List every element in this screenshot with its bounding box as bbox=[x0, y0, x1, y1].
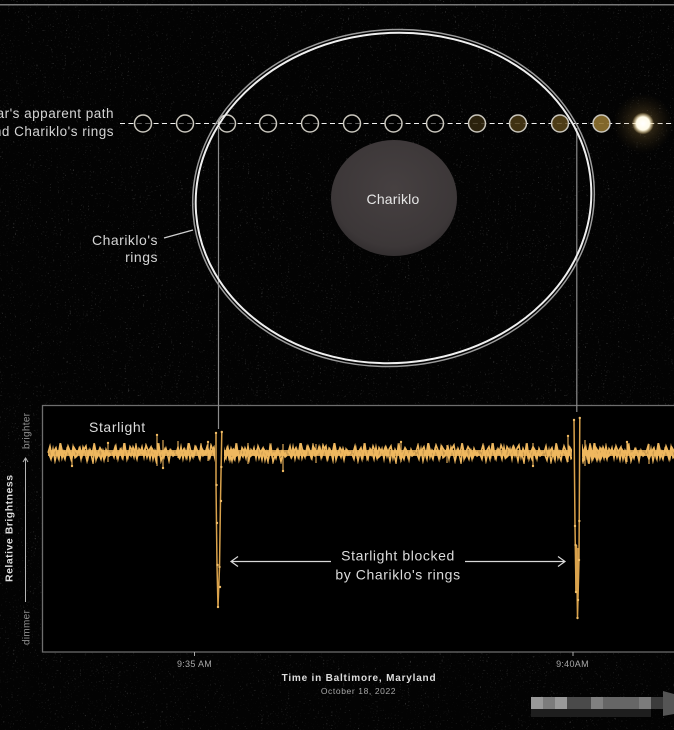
ticks bbox=[194, 652, 573, 656]
dimmer label: dimmer bbox=[22, 609, 32, 645]
y axis arrow bbox=[23, 458, 28, 602]
rings label bbox=[92, 230, 193, 265]
9:40 label: 9:40AM bbox=[556, 659, 589, 669]
data outliers bbox=[72, 435, 649, 471]
occultation dip 2 bbox=[574, 418, 580, 618]
annotation: starlight blocked: by Chariklo's rings bbox=[335, 566, 461, 582]
annotation: starlight blocked bbox=[231, 548, 565, 582]
arrow right bbox=[465, 556, 565, 566]
bright star bbox=[613, 94, 673, 154]
Chariklo label: Chariklo bbox=[367, 191, 419, 207]
top rule bbox=[0, 4, 674, 6]
panel axes bbox=[42, 406, 674, 652]
panel background bbox=[42, 405, 674, 652]
starlight label: Starlight bbox=[89, 419, 146, 435]
x axis title: Time in Baltimore, Maryland bbox=[282, 673, 436, 684]
starlight data series bbox=[48, 435, 674, 471]
x axis bbox=[177, 652, 589, 696]
occultation dip 1 bbox=[216, 432, 222, 607]
brighter label: brighter bbox=[22, 412, 32, 449]
y axis bbox=[4, 412, 32, 645]
light curve panel bbox=[42, 405, 674, 652]
star path label bbox=[0, 106, 114, 139]
projection lines bbox=[218, 128, 577, 429]
rings label: Chariklo's bbox=[92, 232, 158, 248]
y axis title: Relative Brightness bbox=[4, 474, 16, 582]
blurred watermark bbox=[531, 691, 674, 717]
date: October 18, 2022 bbox=[321, 686, 396, 696]
arrow left bbox=[231, 556, 331, 566]
annotation: starlight blocked: Starlight blocked bbox=[341, 548, 455, 564]
rings label: rings bbox=[125, 249, 158, 265]
occultation diagram bbox=[0, 14, 674, 429]
star path dashed line bbox=[120, 122, 674, 124]
Chariklo body bbox=[331, 140, 457, 256]
Chariklo's rings bbox=[180, 14, 607, 382]
star positions bbox=[134, 115, 610, 132]
9:35 label: 9:35 AM bbox=[177, 659, 212, 669]
